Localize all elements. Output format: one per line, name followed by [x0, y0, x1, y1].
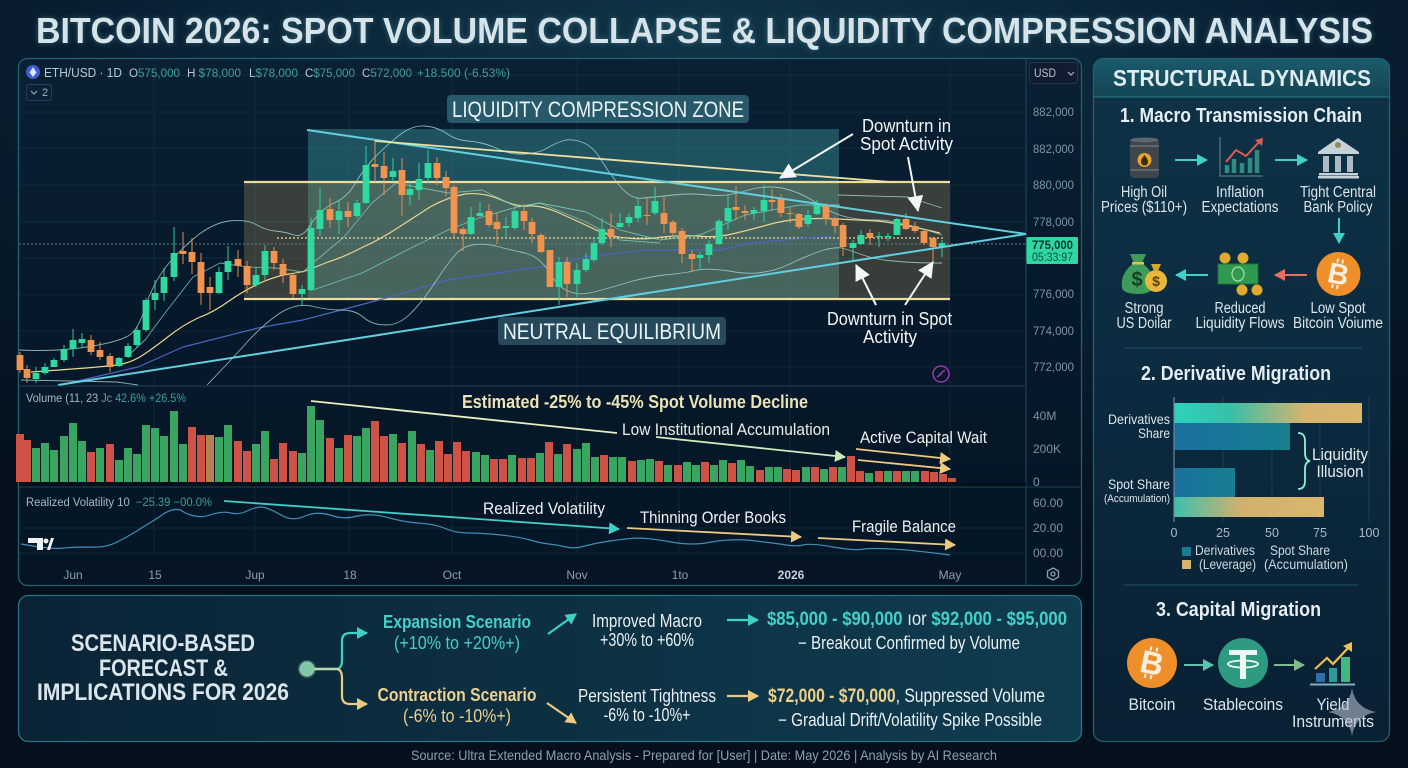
liquidity compression zone	[308, 129, 839, 298]
header: ticker readout: C$75,000	[305, 68, 355, 80]
icon: settings gear	[1048, 568, 1058, 580]
arrow: red left	[1275, 274, 1307, 276]
labels: first chain row: Expectations	[1202, 199, 1279, 216]
callout: realized volatility	[224, 500, 619, 529]
price axis: 880,000	[1033, 178, 1074, 192]
time axis: Jup	[245, 568, 265, 582]
bar chart: derivative share: 0	[1171, 526, 1178, 540]
time axis: Oct	[443, 568, 462, 582]
time axis: May	[939, 568, 961, 582]
callout: active capital wait	[856, 429, 987, 469]
section 2 heading: 2. Derivative Migration	[1141, 363, 1331, 385]
panel: structural dynamics	[1094, 58, 1390, 742]
header: ticker readout	[26, 65, 510, 80]
panel: price chart	[18, 58, 1082, 586]
icon: money bags: $	[1152, 273, 1160, 289]
labels: second chain row: Low Spot	[1310, 300, 1366, 317]
icon: chart brand mark	[28, 538, 54, 550]
neutral equilibrium band	[244, 182, 950, 299]
contraction price target: $72,000 - $70,000, Suppressed Volume	[768, 686, 1045, 707]
arrow: expansion up	[548, 614, 576, 634]
current price tag	[1026, 237, 1078, 264]
time axis: 18	[343, 568, 357, 582]
contraction scenario: Contraction Scenario	[378, 685, 537, 705]
header: ticker readout: H $78,000	[187, 68, 241, 80]
labels: second chain row: Liquidity Flows	[1196, 315, 1285, 332]
callout: fragile balance: Fragile Balance	[852, 518, 956, 536]
labels: first chain row: Tight Central	[1300, 184, 1376, 201]
liquidity illusion brace: Liquidity	[1312, 445, 1368, 464]
time axis: 1to	[672, 568, 689, 582]
icon: stablecoin	[1218, 638, 1268, 688]
icon: sparkle watermark	[1328, 688, 1376, 736]
callout: active capital wait: Active Capital Wait	[860, 429, 987, 447]
label: neutral equilibrium: NEUTRAL EQUILIBRIUM	[503, 319, 721, 344]
panel header: STRUCTURAL DYNAMICS	[1113, 65, 1371, 91]
bar chart: derivative share: Share	[1138, 425, 1170, 441]
candlesticks	[20, 141, 942, 383]
improved macro: +30% to +60%	[600, 630, 694, 650]
volume axis: 40M	[1033, 409, 1056, 423]
label: liquidity compression zone: LIQUIDITY COMPRESSION ZONE	[452, 97, 744, 122]
annotation: downturn in spot activity bottom: Activity	[863, 327, 917, 347]
indicator toggle: 2	[42, 87, 48, 99]
moving averages and bands	[19, 126, 942, 385]
price axis: 776,000	[1033, 287, 1074, 301]
liquidity illusion brace	[1298, 433, 1368, 489]
bar chart: derivative share: 50	[1265, 526, 1279, 540]
callout: thinning order books: Thinning Order Books	[640, 509, 786, 527]
labels: second chain row: Bitcoin Voiume	[1293, 315, 1383, 332]
bar chart: derivative share: (Accumulation)	[1104, 493, 1170, 505]
bar chart: derivative share: 100	[1359, 526, 1379, 540]
volume bars	[20, 406, 952, 482]
bar chart: derivative share: 25	[1216, 526, 1230, 540]
icon: bitcoin low volume	[1316, 252, 1360, 296]
volatility axis	[1033, 496, 1063, 560]
time axis: Nov	[566, 568, 588, 582]
improved macro	[592, 611, 702, 650]
contraction price target	[768, 686, 1045, 730]
annotation: downturn in spot activity bottom: Downturn in Spot	[827, 309, 952, 329]
labels: capital migration: Yield	[1316, 696, 1350, 714]
labels: second chain row	[1116, 300, 1383, 332]
header: ticker readout: O575,000	[129, 68, 180, 80]
time axis: 2026	[778, 568, 805, 582]
labels: capital migration: Stablecoins	[1203, 696, 1283, 714]
annotation: downturn in spot activity top: Downturn in	[862, 116, 951, 136]
icon: money bags	[1122, 254, 1167, 294]
expansion scenario: Expansion Scenario	[383, 612, 531, 632]
trend lines: compression wedge	[58, 130, 1026, 385]
callout: thinning order books	[627, 509, 801, 537]
annotation: downturn in spot activity top	[780, 116, 953, 211]
dotted price lines	[19, 238, 1026, 244]
panel: scenario forecast	[18, 596, 1082, 742]
labels: first chain row: Inflation	[1216, 184, 1264, 201]
header: ticker readout: L$78,000	[249, 68, 298, 80]
icon: bitcoin	[1127, 638, 1177, 688]
header: ticker readout: C572,000	[362, 68, 412, 80]
price axis: 772,000	[1033, 360, 1074, 374]
volatility header: Realized Volatility 10 −25.39 −00.0%	[26, 497, 212, 509]
bar chart: derivative share	[1104, 397, 1379, 540]
panel header	[1094, 59, 1389, 97]
price axis: 882,000	[1033, 105, 1074, 119]
labels: first chain row: Bank Policy	[1304, 199, 1373, 216]
branching connector	[300, 633, 367, 704]
persistent tightness: -6% to -10%+	[604, 705, 690, 725]
expansion price target	[767, 609, 1067, 653]
arrow	[1275, 159, 1307, 161]
expansion price target: − Breakout Confirmed by Volume	[798, 633, 1020, 653]
section 3 heading: 3. Capital Migration	[1156, 599, 1321, 621]
liquidity illusion brace: Illusion	[1316, 462, 1364, 481]
labels: second chain row: US Doilar	[1116, 315, 1172, 332]
volume axis: 200K	[1033, 442, 1061, 456]
icon: bitcoin low volume: B	[1325, 257, 1352, 293]
contraction scenario	[378, 685, 537, 726]
labels: capital migration: Instruments	[1292, 713, 1374, 731]
time axis: 15	[148, 568, 162, 582]
persistent tightness: Persistent Tightness	[578, 686, 716, 706]
arrow: down	[1338, 218, 1340, 243]
icon: cash and coins	[1218, 252, 1262, 296]
chart legend: (Accumulation)	[1264, 557, 1348, 572]
indicator toggle	[26, 84, 52, 100]
arrow: tightness to target	[727, 695, 758, 697]
annotation: downturn in spot activity bottom	[827, 262, 952, 347]
scenario heading: FORECAST &	[99, 655, 228, 682]
volume axis	[1033, 409, 1061, 489]
arrow	[1175, 159, 1207, 161]
labels: second chain row: Strong	[1124, 300, 1164, 317]
icon: lightning badge	[933, 366, 949, 382]
bar chart: derivative share: Spot Share	[1108, 476, 1170, 492]
volatility axis: 20.00	[1033, 521, 1063, 535]
header: ticker readout: ETH/USD · 1D	[44, 66, 122, 80]
bar chart: derivative share: Derivatives	[1108, 411, 1170, 427]
volatility axis: 00.00	[1033, 546, 1063, 560]
footer source: Source: Ultra Extended Macro Analysis - Prepared for [User] | Date: May 2026 | Analysis by AI Research	[411, 747, 997, 763]
labels: first chain row: High Oil	[1121, 184, 1167, 201]
header: ticker readout: +18.500 (-6.53%)	[417, 68, 510, 80]
volatility line	[21, 507, 950, 555]
labels: first chain row: Prices ($110+)	[1101, 199, 1187, 216]
icon: inflation chart	[1220, 137, 1263, 176]
price axis: 882,000	[1033, 142, 1074, 156]
annotation: downturn in spot activity top: Spot Activity	[860, 134, 953, 154]
chart legend	[1182, 543, 1348, 572]
chart legend: Spot Share	[1270, 543, 1330, 558]
expansion scenario	[383, 612, 531, 653]
volume axis: 0	[1033, 475, 1040, 489]
current price tag: 05:33:97	[1032, 252, 1073, 264]
icon: yield chart	[1310, 642, 1355, 684]
callout: realized volatility: Realized Volatility	[483, 500, 606, 518]
scenario heading: IMPLICATIONS FOR 2026	[37, 679, 289, 706]
arrow: teal left	[1176, 274, 1208, 276]
volume header: Volume (11, 23 Jc 42.6% +26.5%	[26, 393, 186, 405]
labels: second chain row: Reduced	[1214, 300, 1266, 317]
contraction price target: − Gradual Drift/Volatility Spike Possible	[778, 710, 1042, 730]
chart legend: (Leverage)	[1199, 557, 1256, 572]
price axis: 778,000	[1033, 215, 1074, 229]
current price tag: 775,000	[1032, 238, 1073, 252]
callout: low institutional accumulation: Low Institutional Accumulation	[622, 421, 830, 439]
arrow	[1184, 664, 1213, 666]
arrow: macro to target	[727, 619, 758, 621]
price axis	[1033, 105, 1074, 374]
expansion scenario: (+10% to +20%+)	[394, 633, 520, 653]
time axis	[63, 568, 961, 582]
arrow	[1274, 664, 1304, 666]
icon: central bank	[1318, 138, 1359, 178]
labels: capital migration	[1128, 696, 1374, 731]
section 1 heading: 1. Macro Transmission Chain	[1120, 105, 1362, 127]
icon: bitcoin: B	[1137, 643, 1167, 683]
contraction scenario: (-6% to -10%+)	[403, 706, 511, 726]
price axis: 774,000	[1033, 324, 1074, 338]
arrow: contraction down	[547, 703, 576, 723]
labels: capital migration: Bitcoin	[1128, 696, 1176, 714]
expansion price target: $85,000 - $90,000 ıor $92,000 - $95,000	[767, 609, 1067, 630]
volatility axis: 60.00	[1033, 496, 1063, 510]
currency selector	[1030, 62, 1078, 84]
icon: money bags: $	[1131, 269, 1143, 291]
icon: oil barrel	[1130, 138, 1159, 178]
callout: estimated volume decline: Estimated -25% to -45% Spot Volume Decline	[462, 392, 808, 412]
labels: first chain row	[1101, 184, 1376, 216]
bar chart: derivative share: 75	[1313, 526, 1327, 540]
improved macro: Improved Macro	[592, 611, 702, 631]
scenario heading	[37, 630, 289, 706]
time axis: Jun	[63, 568, 83, 582]
chart legend: Derivatives	[1195, 543, 1255, 558]
persistent tightness	[578, 686, 716, 725]
currency selector: USD	[1034, 68, 1056, 80]
scenario heading: SCENARIO-BASED	[71, 630, 255, 657]
callout: fragile balance	[818, 518, 956, 545]
callout: estimated volume decline	[311, 392, 845, 457]
